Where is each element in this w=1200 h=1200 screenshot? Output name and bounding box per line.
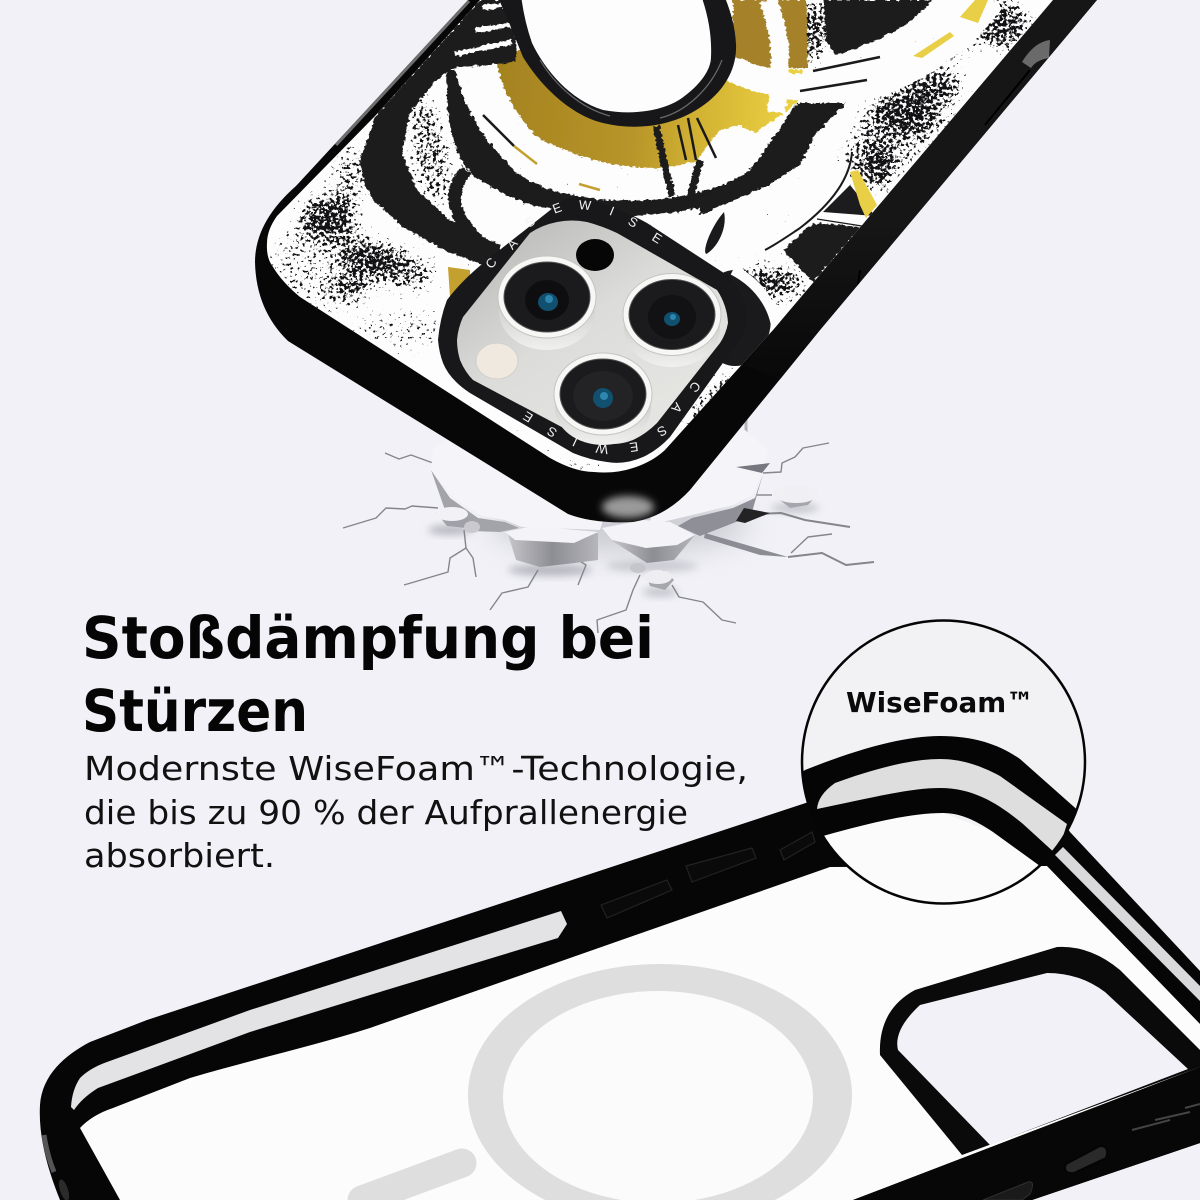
third small arc xyxy=(454,170,477,240)
lens 2 xyxy=(623,274,721,367)
lens 3 xyxy=(554,353,652,445)
heading: Stürzen xyxy=(82,677,308,745)
lower rim reflections xyxy=(1132,1104,1200,1130)
black band along top left edge with outer arc xyxy=(360,0,516,270)
black blob top right xyxy=(823,0,932,55)
white arc round camera xyxy=(733,270,777,340)
bottom phone: clear case xyxy=(40,760,1200,1200)
left corner gloss and port xyxy=(44,1135,71,1200)
white circle xyxy=(521,0,711,112)
lens 1 xyxy=(498,256,596,350)
impact cracks in surface xyxy=(343,400,874,633)
left plate top xyxy=(431,400,640,530)
dark crack gap xyxy=(736,508,770,523)
CASEWISE rim lettering: S xyxy=(625,213,641,231)
body text xyxy=(84,749,748,875)
translucent side strip xyxy=(71,911,567,1110)
CASEWISE rim lettering xyxy=(482,197,704,457)
case back artwork xyxy=(266,0,1053,472)
chunk left xyxy=(505,526,598,567)
lower right black wedge xyxy=(783,223,861,282)
thin curved line xyxy=(765,152,852,250)
camera island xyxy=(438,197,747,463)
case black frame xyxy=(40,760,1200,1200)
CASEWISE rim lettering: I xyxy=(570,434,580,450)
top phone with Casewise case xyxy=(255,0,1105,522)
CASEWISE rim lettering: I xyxy=(608,203,616,219)
right translucent strip xyxy=(1055,847,1200,1001)
clear back panel xyxy=(80,866,1200,1200)
CASEWISE rim lettering: C xyxy=(482,255,500,271)
black shape behind camera xyxy=(722,270,771,366)
left plate wall xyxy=(431,470,519,532)
black wedge right of arc xyxy=(700,103,846,215)
chunk right xyxy=(602,520,695,563)
white patch on gold xyxy=(698,124,755,160)
CASEWISE rim lettering: E xyxy=(520,408,536,426)
CASEWISE rim lettering: C xyxy=(686,379,704,395)
magsafe ring xyxy=(468,964,852,1200)
magnifier callout: WiseFoam xyxy=(800,619,1086,905)
yellow accents xyxy=(448,0,988,297)
CASEWISE rim lettering: S xyxy=(654,422,670,440)
island opening xyxy=(457,220,728,444)
CASEWISE rim lettering: S xyxy=(544,423,560,441)
crack triangle xyxy=(736,463,770,473)
gold ring upper xyxy=(733,0,808,68)
lower edge black rim xyxy=(853,1067,1200,1200)
magnifier outline xyxy=(802,620,1085,904)
gold flecks xyxy=(514,146,600,190)
artwork white base xyxy=(266,0,1053,472)
white vertical brush xyxy=(768,0,780,112)
white stripes in black band xyxy=(455,4,512,54)
black leaf stroke xyxy=(705,212,725,254)
body text: absorbiert. xyxy=(84,836,275,875)
rough painted strokes xyxy=(360,0,992,282)
body text: Modernste WiseFoam™-Technologie, xyxy=(84,749,748,788)
magnifier label: WiseFoam™ xyxy=(846,686,1034,719)
speckle between arcs xyxy=(402,90,458,210)
CASEWISE rim lettering: W xyxy=(578,197,592,213)
gold ring lower xyxy=(497,50,803,168)
volume buttons xyxy=(601,832,815,918)
flash xyxy=(476,343,518,379)
CASEWISE rim lettering: A xyxy=(668,400,686,416)
CASEWISE rim lettering: S xyxy=(522,213,538,230)
CASEWISE rim lettering: E xyxy=(649,229,665,247)
CASEWISE rim lettering: W xyxy=(594,441,609,457)
case black bumper xyxy=(255,0,1097,522)
thin black brush lines xyxy=(483,57,880,160)
lidar hole xyxy=(576,239,614,271)
grunge speckle xyxy=(270,0,1030,470)
heading: Stoßdämpfung bei xyxy=(82,604,654,672)
bumper gloss highlight xyxy=(335,0,1097,518)
black streaks under ring xyxy=(656,126,700,200)
crack lines xyxy=(343,415,874,633)
heading xyxy=(82,604,654,745)
crater soft shadow xyxy=(428,497,819,597)
white brush band over gold xyxy=(730,0,992,90)
ring brush streaks xyxy=(540,60,722,118)
camera cut-out window xyxy=(897,973,1188,1145)
right plate wall xyxy=(678,474,763,536)
lower rim side button xyxy=(983,1182,1033,1200)
body text: die bis zu 90 % der Aufprallenergie xyxy=(84,793,688,832)
magnifier fill xyxy=(802,620,1085,904)
right plate top xyxy=(650,430,768,525)
black brush arc inner xyxy=(447,70,750,215)
lower rim mute switch xyxy=(1065,1146,1107,1173)
long right crack wedge xyxy=(704,533,788,557)
black ring around white circle xyxy=(497,0,736,127)
small black triangle and yellow stripe xyxy=(817,170,877,226)
magsafe slot xyxy=(362,1163,462,1200)
camera cut-out frame xyxy=(880,947,1200,1155)
CASEWISE rim lettering: E xyxy=(628,439,639,455)
CASEWISE rim lettering: E xyxy=(550,199,564,217)
magnified case corner xyxy=(804,736,1076,902)
island rim xyxy=(438,198,747,463)
pebbles xyxy=(436,485,818,590)
CASEWISE rim lettering: A xyxy=(504,236,521,252)
